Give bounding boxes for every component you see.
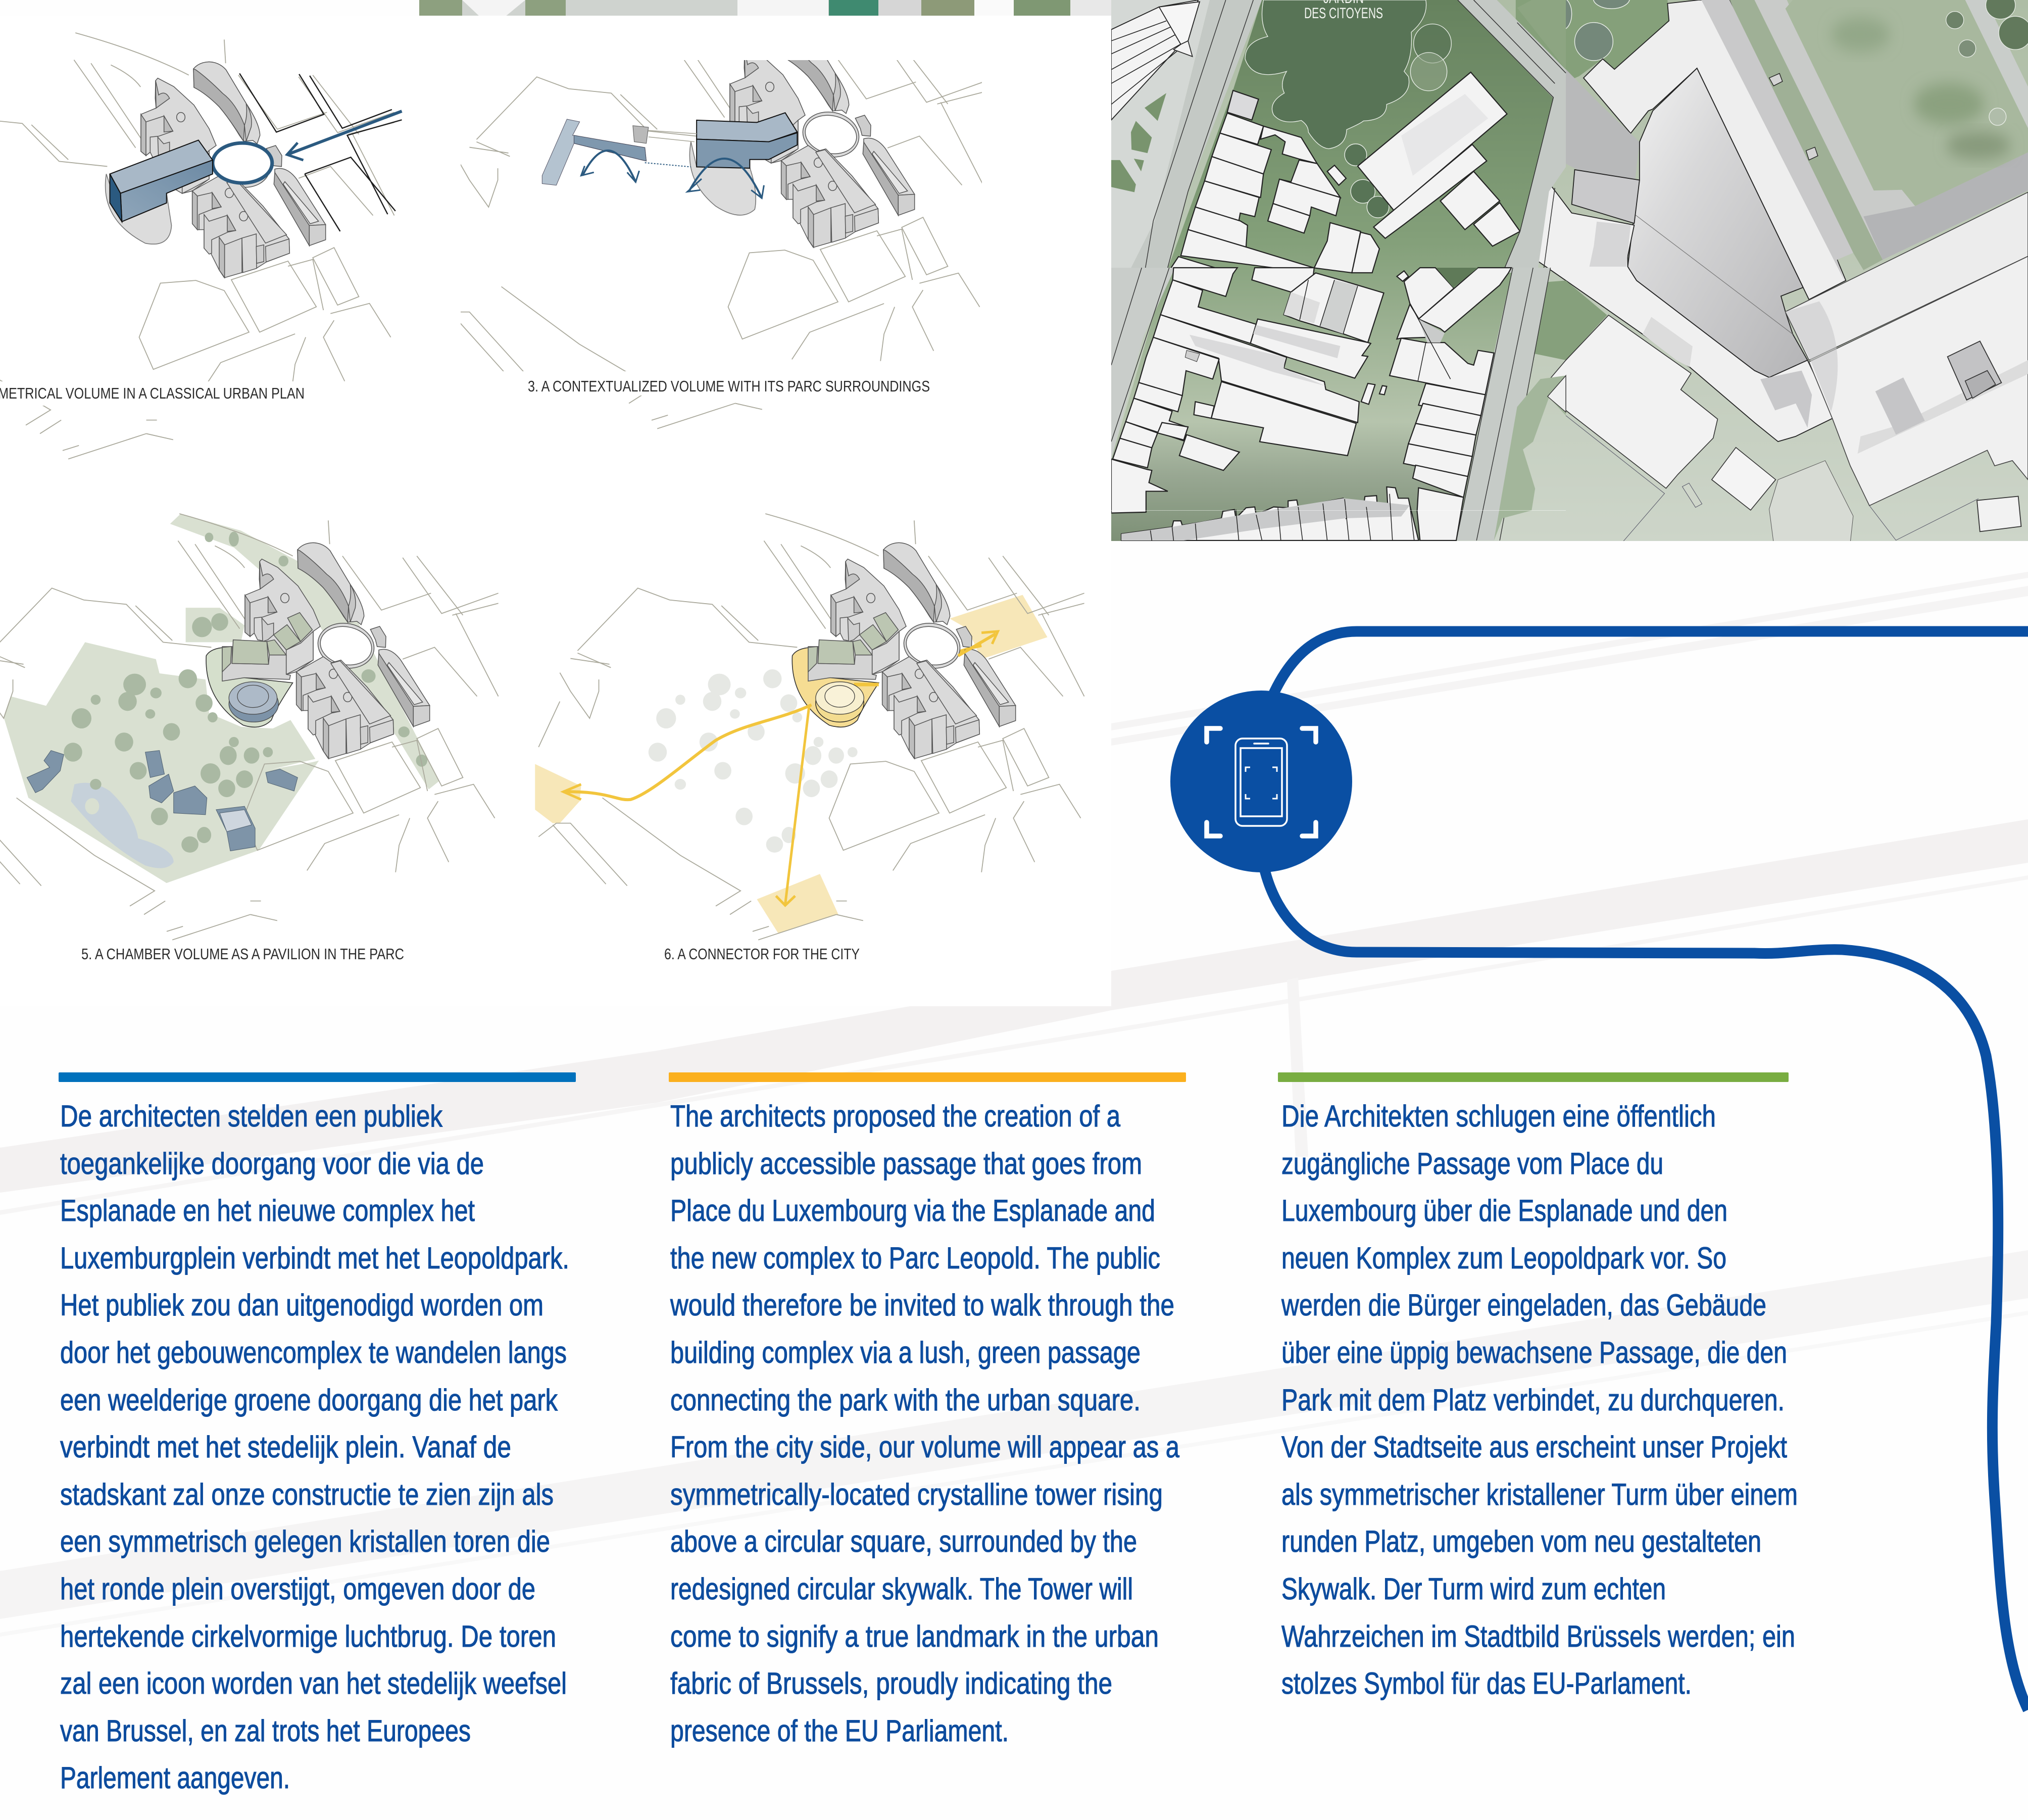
background pattern — [0, 572, 2028, 1637]
rule: Dutch column — [59, 1072, 576, 1082]
text block: German: als symmetrischer kristallener Turm über einem — [1281, 1478, 1798, 1511]
text block: German: werden die Bürger eingeladen, das Gebäude — [1281, 1288, 1766, 1322]
text block: Dutch: het ronde plein overstijgt, omgeven door de — [60, 1572, 535, 1606]
text block: Dutch: stadskant zal onze constructie te zien zijn als — [60, 1478, 554, 1511]
text block: Dutch: Het publiek zou dan uitgenodigd worden om — [60, 1288, 543, 1322]
text block: German: Die Architekten schlugen eine öffentlich — [1281, 1099, 1716, 1133]
text block: English: connecting the park with the urban square. — [670, 1383, 1141, 1417]
icon: phone scan — [1170, 691, 1352, 872]
text block: English: redesigned circular skywalk. The Tower will — [670, 1572, 1133, 1606]
text block: English: Place du Luxembourg via the Esplanade and — [670, 1194, 1155, 1227]
text block: English: building complex via a lush, green passage — [670, 1336, 1141, 1369]
text block: German: Skywalk. Der Turm wird zum echten — [1281, 1572, 1666, 1606]
text block: Dutch: Parlement aangeven. — [60, 1761, 290, 1795]
caption 2: METRICAL VOLUME IN A CLASSICAL URBAN PLAN — [0, 384, 305, 402]
text block: English — [670, 1099, 1180, 1748]
map east: tower, cross block and lawn — [1516, 0, 2028, 543]
text block: German: runden Platz, umgeben vom neu gestalteten — [1281, 1524, 1761, 1558]
rule: German column — [1278, 1072, 1789, 1082]
central road — [1458, 0, 1566, 273]
map: site plan — [1108, 0, 2028, 543]
text block: German: Luxembourg über die Esplanade und den — [1281, 1194, 1727, 1227]
text block: German: über eine üppig bewachsene Passage, die den — [1281, 1336, 1787, 1369]
text block: English: From the city side, our volume will appear as a — [670, 1430, 1180, 1464]
text block: Dutch: zal een icoon worden van het stedelijk weefsel — [60, 1666, 567, 1700]
map south-west: parcels and saw-tooth row — [1108, 268, 1566, 540]
text block: Dutch — [60, 1099, 569, 1795]
text block: English: symmetrically-located crystalline tower rising — [670, 1478, 1163, 1511]
text block: Dutch: De architecten stelden een publiek — [60, 1099, 443, 1133]
diagram 5: chamber as pavilion in the parc — [0, 514, 499, 940]
text block: German: stolzes Symbol für das EU-Parlament. — [1281, 1666, 1692, 1700]
map label: jardin des citoyens — [1304, 0, 1383, 22]
text block: English: fabric of Brussels, proudly indicating the — [670, 1666, 1112, 1700]
text block: German: Wahrzeichen im Stadtbild Brüssels werden; ein — [1281, 1619, 1795, 1653]
jardin des citoyens garden — [1245, 0, 1426, 149]
caption 5: 5. A CHAMBER VOLUME AS A PAVILION IN THE PARC — [81, 945, 404, 963]
text block: German: Park mit dem Platz verbindet, zu durchqueren. — [1281, 1383, 1785, 1417]
text block: Dutch: Esplanade en het nieuwe complex het — [60, 1194, 475, 1227]
map strip above the diagram panel — [419, 0, 1111, 17]
map ground — [1111, 0, 2028, 541]
text block: English: presence of the EU Parliament. — [670, 1714, 1009, 1748]
rule: English column — [669, 1072, 1186, 1082]
text block: Dutch: een symmetrisch gelegen kristallen toren die — [60, 1524, 550, 1558]
map centre: green courtyard block — [1111, 0, 1553, 541]
text block: Dutch: door het gebouwencomplex te wandelen langs — [60, 1336, 567, 1369]
text block: Dutch: Luxemburgplein verbindt met het Leopoldpark. — [60, 1241, 569, 1275]
text block: English: above a circular square, surrounded by the — [670, 1524, 1137, 1558]
diagram 2: symmetrical volume — [0, 33, 402, 459]
diagram 3: contextualized volume — [437, 3, 983, 429]
text block: German: Von der Stadtseite aus erscheint unser Projekt — [1281, 1430, 1787, 1464]
text block: Dutch: toegankelijke doorgang voor die via de — [60, 1147, 484, 1180]
text block: German: neuen Komplex zum Leopoldpark vor. So — [1281, 1241, 1726, 1275]
text block: English: The architects proposed the creation of a — [670, 1099, 1121, 1133]
text block: English: publicly accessible passage that goes from — [670, 1147, 1142, 1180]
text block: English: come to signify a true landmark in the urban — [670, 1619, 1159, 1653]
text block: English: the new complex to Parc Leopold. The public — [670, 1241, 1160, 1275]
text block: German — [1281, 1099, 1798, 1700]
text block: Dutch: van Brussel, en zal trots het Europees — [60, 1714, 471, 1748]
diagram 6: connector for the city — [535, 514, 1084, 940]
text block: English: would therefore be invited to walk through the — [670, 1288, 1174, 1322]
small wedge of lawn — [1517, 0, 1566, 70]
map label: jardin des citoyens: DES CITOYENS — [1304, 5, 1383, 22]
map north-west: plaza, garden and parcels — [1111, 0, 1566, 273]
caption 6: 6. A CONNECTOR FOR THE CITY — [664, 945, 860, 963]
panel: concept diagrams — [0, 3, 1111, 1006]
text block: Dutch: hertekende cirkelvormige luchtbrug. De toren — [60, 1619, 556, 1653]
text block: German: zugängliche Passage vom Place du — [1281, 1147, 1663, 1180]
text block: Dutch: een weelderige groene doorgang die het park — [60, 1383, 558, 1417]
blue route line — [1263, 631, 2028, 1710]
caption 3: 3. A CONTEXTUALIZED VOLUME WITH ITS PARC SURROUNDINGS — [528, 377, 930, 395]
text block: Dutch: verbindt met het stedelijk plein. Vanaf de — [60, 1430, 511, 1464]
